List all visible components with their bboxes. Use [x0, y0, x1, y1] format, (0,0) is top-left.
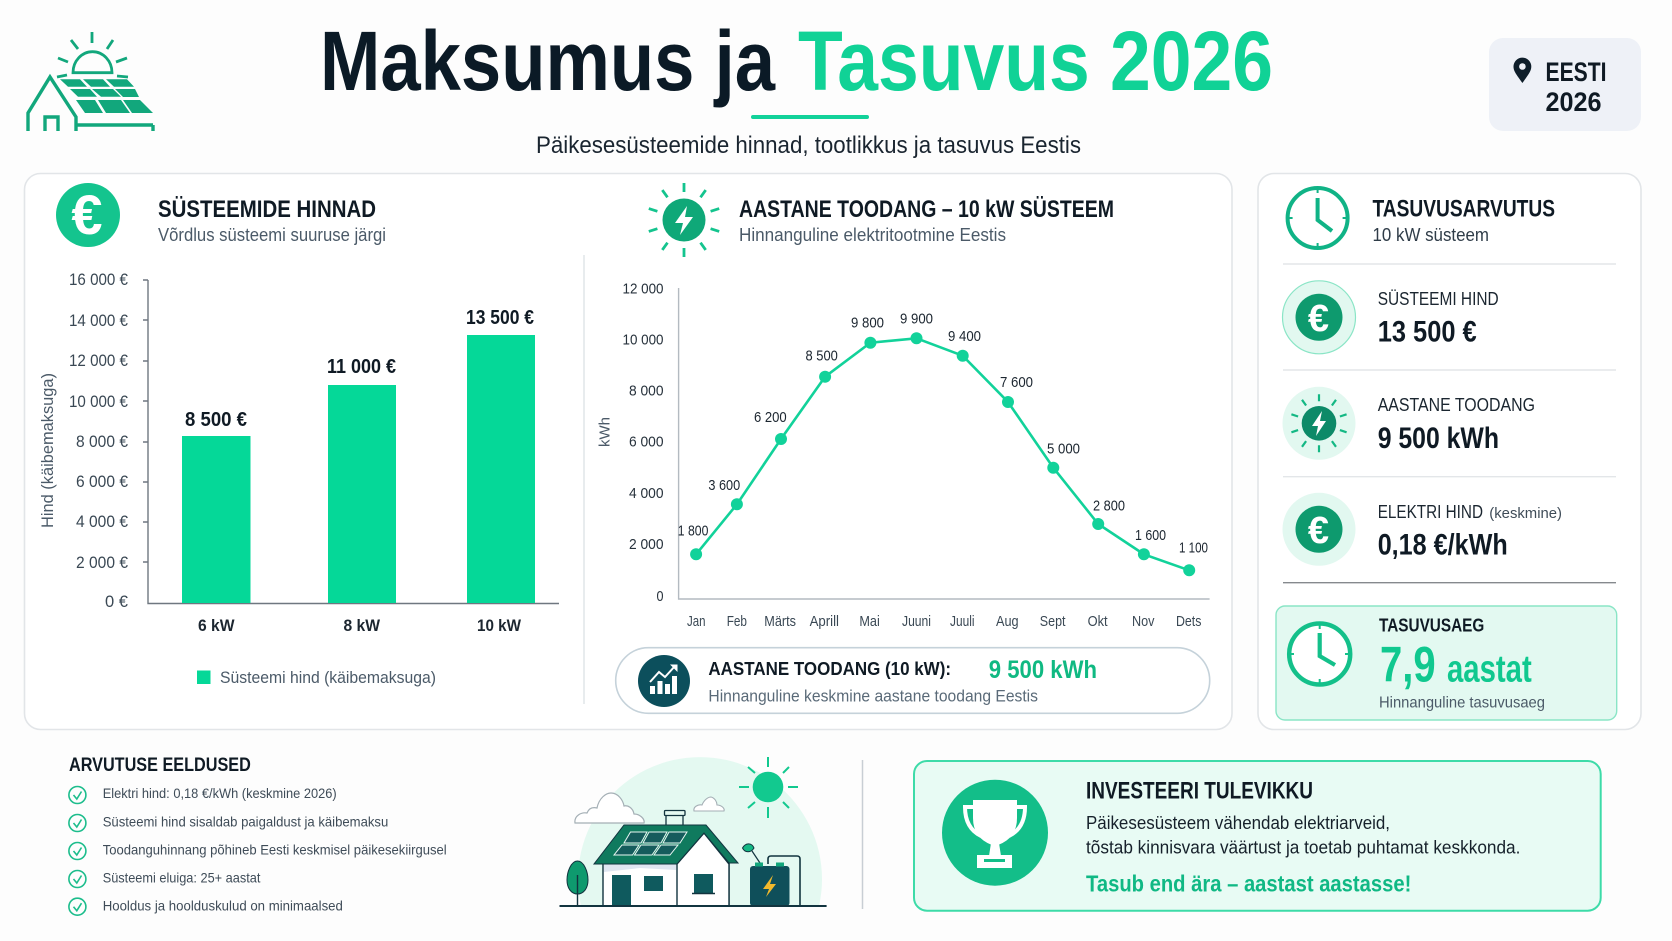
title: Maksumus ja: [320, 14, 776, 108]
bar chart: system prices: 10 000 €: [69, 392, 128, 411]
line chart: monthly production: 12 000: [622, 280, 664, 298]
callout: payback time: 7,9: [1380, 637, 1436, 693]
heading: payback calculation: 10 kW süsteem: [1372, 225, 1489, 245]
line chart: monthly production: Okt: [1088, 613, 1108, 630]
line chart: monthly production: 0: [656, 588, 664, 605]
heading: annual production: Hinnanguline elektritootmine Eestis: [739, 225, 1006, 245]
metric: system price: [1282, 281, 1499, 354]
metric: system price: SÜSTEEMI HIND: [1378, 289, 1499, 309]
line chart: monthly production: 4 000: [629, 485, 664, 502]
icon: trophy: [942, 780, 1048, 886]
subtitle: Päikesesüsteemide hinnad, tootlikkus ja tasuvus Eestis: [536, 132, 1081, 159]
title: Tasuvus 2026: [798, 14, 1273, 108]
panel: calculation assumptions: [69, 755, 447, 915]
location badge: 2026: [1546, 87, 1602, 117]
location badge: [1489, 38, 1641, 131]
metric: annual production: 9 500 kWh: [1378, 422, 1499, 455]
line chart: monthly production: Sept: [1040, 613, 1066, 630]
list item 2: Süsteemi hind sisaldab paigaldust ja käibemaksu: [103, 813, 388, 829]
line chart: monthly production: 9 400: [948, 328, 981, 345]
panel: payback calculation: [1258, 174, 1641, 730]
bar chart: system prices: [38, 270, 559, 635]
chart legend: Süsteemi hind (käibemaksuga): [220, 668, 436, 687]
bar chart: system prices: 16 000 €: [69, 270, 128, 289]
bar chart: system prices: 10 kW: [477, 616, 522, 635]
bar chart: system prices: 13 500 €: [466, 307, 534, 329]
list item 4: Süsteemi eluiga: 25+ aastat: [103, 869, 260, 885]
metric: electricity price: [1282, 493, 1562, 566]
bar chart: system prices: 8 kW: [344, 616, 381, 635]
metric: electricity price: €: [1308, 510, 1329, 552]
line chart: monthly production: Nov: [1132, 613, 1155, 630]
metric: annual production: AASTANE TOODANG: [1378, 395, 1535, 415]
line chart: monthly production: 10 000: [622, 332, 664, 348]
metric: electricity price: (keskmine): [1489, 505, 1562, 522]
list item 1: Elektri hind: 0,18 €/kWh (keskmine 2026): [103, 785, 337, 801]
line chart: monthly production: Dets: [1176, 613, 1201, 630]
heading: payback calculation: TASUVUSARVUTUS: [1372, 196, 1555, 223]
icon: sun with bolt: [649, 183, 719, 257]
line chart: monthly production: 3 600: [708, 477, 740, 494]
title underline: [751, 115, 869, 119]
line chart: monthly production: 8 500: [806, 348, 838, 365]
icon: clock: [1288, 188, 1348, 248]
bar chart: system prices: 12 000 €: [69, 351, 128, 370]
line chart: monthly production: 2 800: [1093, 497, 1125, 514]
metric: annual production: [1282, 387, 1535, 460]
line chart: monthly production: 6 200: [754, 409, 787, 426]
line chart: monthly production: Aprill: [810, 613, 839, 630]
callout: annual production total: [616, 648, 1210, 713]
callout: annual production total: 9 500 kWh: [989, 656, 1097, 684]
heading: annual production: [739, 196, 1114, 245]
callout: payback time: TASUVUSAEG: [1379, 616, 1484, 636]
bar chart: system prices: 2 000 €: [76, 553, 128, 572]
list item 5: Hooldus ja hoolduskulud on minimaalsed: [103, 897, 343, 913]
line chart: monthly production: 5 000: [1047, 441, 1080, 458]
heading: system prices: Võrdlus süsteemi suuruse järgi: [158, 225, 386, 245]
heading: system prices: SÜSTEEMIDE HINNAD: [158, 196, 376, 223]
text: invest in the future: Päikesesüsteem vähendab elektriarveid,: [1086, 813, 1390, 833]
metric: system price: €: [1308, 298, 1329, 340]
line chart: monthly production: kWh: [596, 417, 614, 447]
panel: prices and production: [24, 174, 1232, 730]
line chart: monthly production: 1 100: [1179, 539, 1208, 556]
bar chart: system prices: 6 000 €: [76, 472, 128, 491]
heading: system prices: [158, 196, 386, 245]
line chart: monthly production: [596, 280, 1210, 630]
line chart: monthly production: 8 000: [629, 382, 664, 400]
heading: annual production: AASTANE TOODANG – 10 kW SÜSTEEM: [739, 196, 1114, 223]
bar chart: system prices: 8 000 €: [76, 432, 128, 451]
bar chart: system prices: 11 000 €: [327, 356, 396, 378]
icon: euro: €: [71, 183, 103, 246]
metric: system price: 13 500 €: [1378, 316, 1477, 349]
bar chart: system prices: 14 000 €: [69, 311, 128, 330]
callout: payback time: [1276, 606, 1617, 720]
text: invest in the future: INVESTEERI TULEVIKKU: [1086, 777, 1313, 804]
metric: electricity price: 0,18 €/kWh: [1378, 529, 1508, 562]
line chart: monthly production: Feb: [727, 613, 747, 630]
bar chart: system prices: 0 €: [105, 592, 129, 611]
line chart: monthly production: Juuni: [902, 613, 931, 630]
line chart: monthly production: 9 800: [851, 315, 884, 332]
line chart: monthly production: 9 900: [900, 310, 933, 327]
line chart: monthly production: 1 800: [678, 523, 708, 540]
bar chart: system prices: 8 500 €: [185, 409, 247, 431]
list item 4: [69, 869, 260, 888]
icon: euro: [56, 183, 120, 247]
title: [320, 14, 1273, 108]
bar chart: system prices: 4 000 €: [76, 512, 128, 531]
line chart: monthly production: Mai: [859, 613, 880, 630]
heading: payback calculation: [1372, 196, 1555, 245]
metric: electricity price: ELEKTRI HIND: [1378, 502, 1483, 522]
callout: annual production total: Hinnanguline keskmine aastane toodang Eestis: [708, 687, 1038, 706]
line chart: monthly production: 6 000: [629, 434, 664, 450]
callout: annual production total: AASTANE TOODANG (10 kW):: [708, 659, 951, 679]
line chart: monthly production: 1 600: [1135, 527, 1166, 544]
line chart: monthly production: Juuli: [950, 613, 974, 630]
line chart: monthly production: Aug: [996, 613, 1019, 630]
list item 3: Toodanguhinnang põhineb Eesti keskmisel päikesekiirgusel: [103, 841, 447, 857]
callout: payback time: Hinnanguline tasuvusaeg: [1379, 695, 1545, 712]
line chart: monthly production: 2 000: [629, 536, 664, 553]
illustration: solar house with battery: [560, 757, 827, 906]
text: invest in the future: Tasub end ära – aastast aastasse!: [1086, 871, 1411, 897]
panel: invest in the future: [914, 761, 1601, 911]
location badge: EESTI: [1546, 57, 1606, 87]
bar chart: system prices: 6 kW: [198, 616, 235, 635]
icon: house with solar roof logo: [28, 32, 153, 131]
heading: assumptions: ARVUTUSE EELDUSED: [69, 755, 251, 776]
text: invest in the future: [1086, 777, 1520, 897]
line chart: monthly production: Jan: [687, 613, 706, 630]
line chart: monthly production: Märts: [764, 613, 796, 630]
line chart: monthly production: 7 600: [1000, 374, 1033, 391]
text: invest in the future: tõstab kinnisvara väärtust ja toetab puhtamat keskkonda.: [1086, 838, 1520, 858]
callout: payback time: aastat: [1447, 649, 1532, 691]
bar chart: system prices: Hind (käibemaksuga): [38, 373, 57, 528]
